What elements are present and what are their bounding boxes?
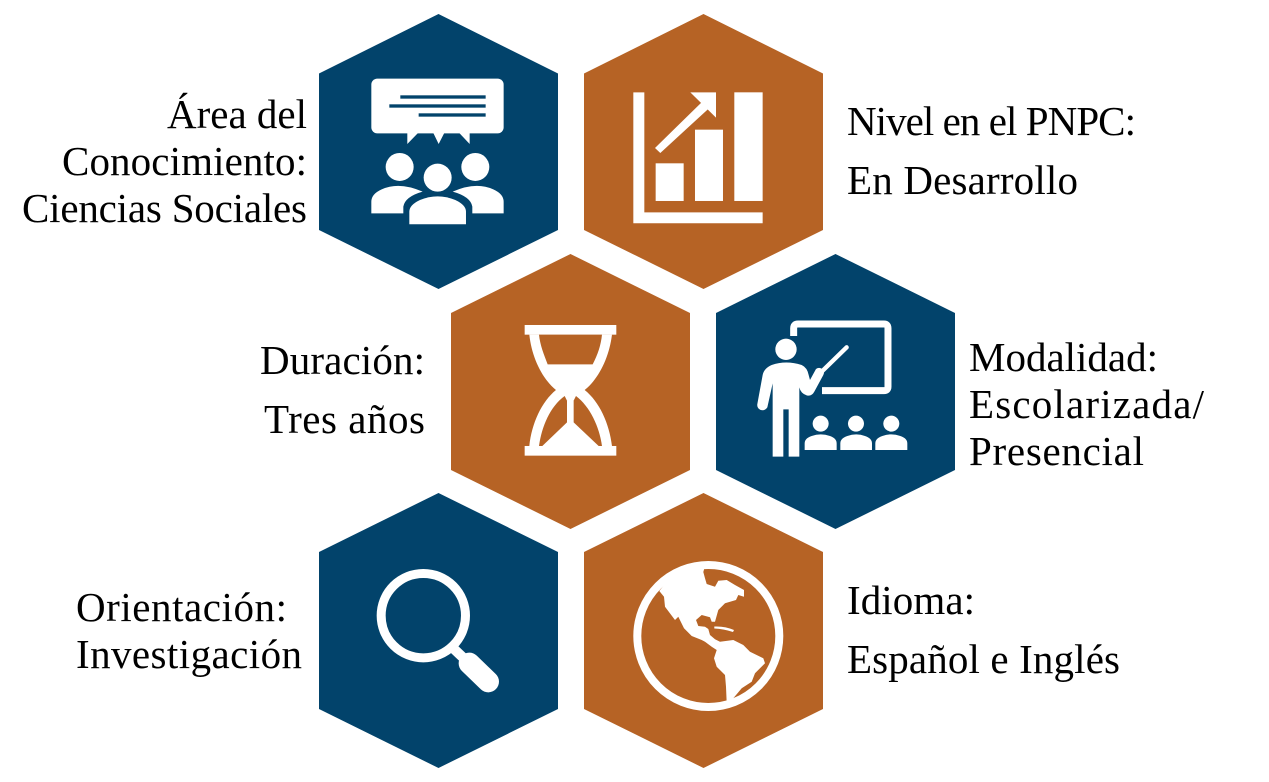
panel: modalidad	[716, 254, 955, 529]
icon: hourglass	[525, 325, 616, 456]
label: modalidad	[969, 334, 1205, 474]
label: duración	[260, 337, 425, 442]
label: modalidad: Modalidad:	[969, 334, 1158, 380]
hexagon: navy	[319, 493, 558, 768]
panel: orientación	[319, 493, 558, 768]
label: idioma: Idioma:	[847, 577, 975, 623]
label: orientación	[76, 584, 302, 677]
label: nivel en el PNPC: En Desarrollo	[847, 157, 1078, 203]
label: área del conocimiento: Área del	[167, 91, 307, 137]
label: modalidad: Escolarizada/	[969, 381, 1205, 427]
label: área del conocimiento: Ciencias Sociales	[22, 185, 307, 231]
hexagon: orange	[451, 254, 690, 529]
panel: idioma	[584, 493, 823, 768]
label: nivel en el PNPC	[847, 98, 1136, 203]
icon: magnifying glass	[381, 573, 488, 682]
panel: duración	[451, 254, 690, 529]
panel: nivel en el PNPC	[584, 14, 823, 289]
label: modalidad: Presencial	[969, 428, 1144, 474]
hexagon: orange	[584, 493, 823, 768]
label: nivel en el PNPC: Nivel en el PNPC:	[847, 98, 1136, 144]
label: orientación: Orientación:	[76, 584, 287, 630]
label: orientación: Investigación	[76, 631, 302, 677]
label: área del conocimiento: Conocimiento:	[62, 138, 307, 184]
hexagon: navy	[716, 254, 955, 529]
label: idioma	[847, 577, 1120, 682]
hexagon: orange	[584, 14, 823, 289]
label: idioma: Español e Inglés	[847, 636, 1120, 682]
icon: globe	[637, 565, 779, 707]
label: duración: Duración:	[260, 337, 425, 383]
label: área del conocimiento	[22, 91, 307, 231]
hexagon: navy	[319, 14, 558, 289]
icon: people talking	[371, 79, 504, 224]
label: duración: Tres años	[264, 396, 425, 442]
panel: área del conocimiento	[319, 14, 558, 289]
icon: growth bar chart	[633, 92, 763, 223]
icon: teacher at board	[757, 324, 907, 457]
